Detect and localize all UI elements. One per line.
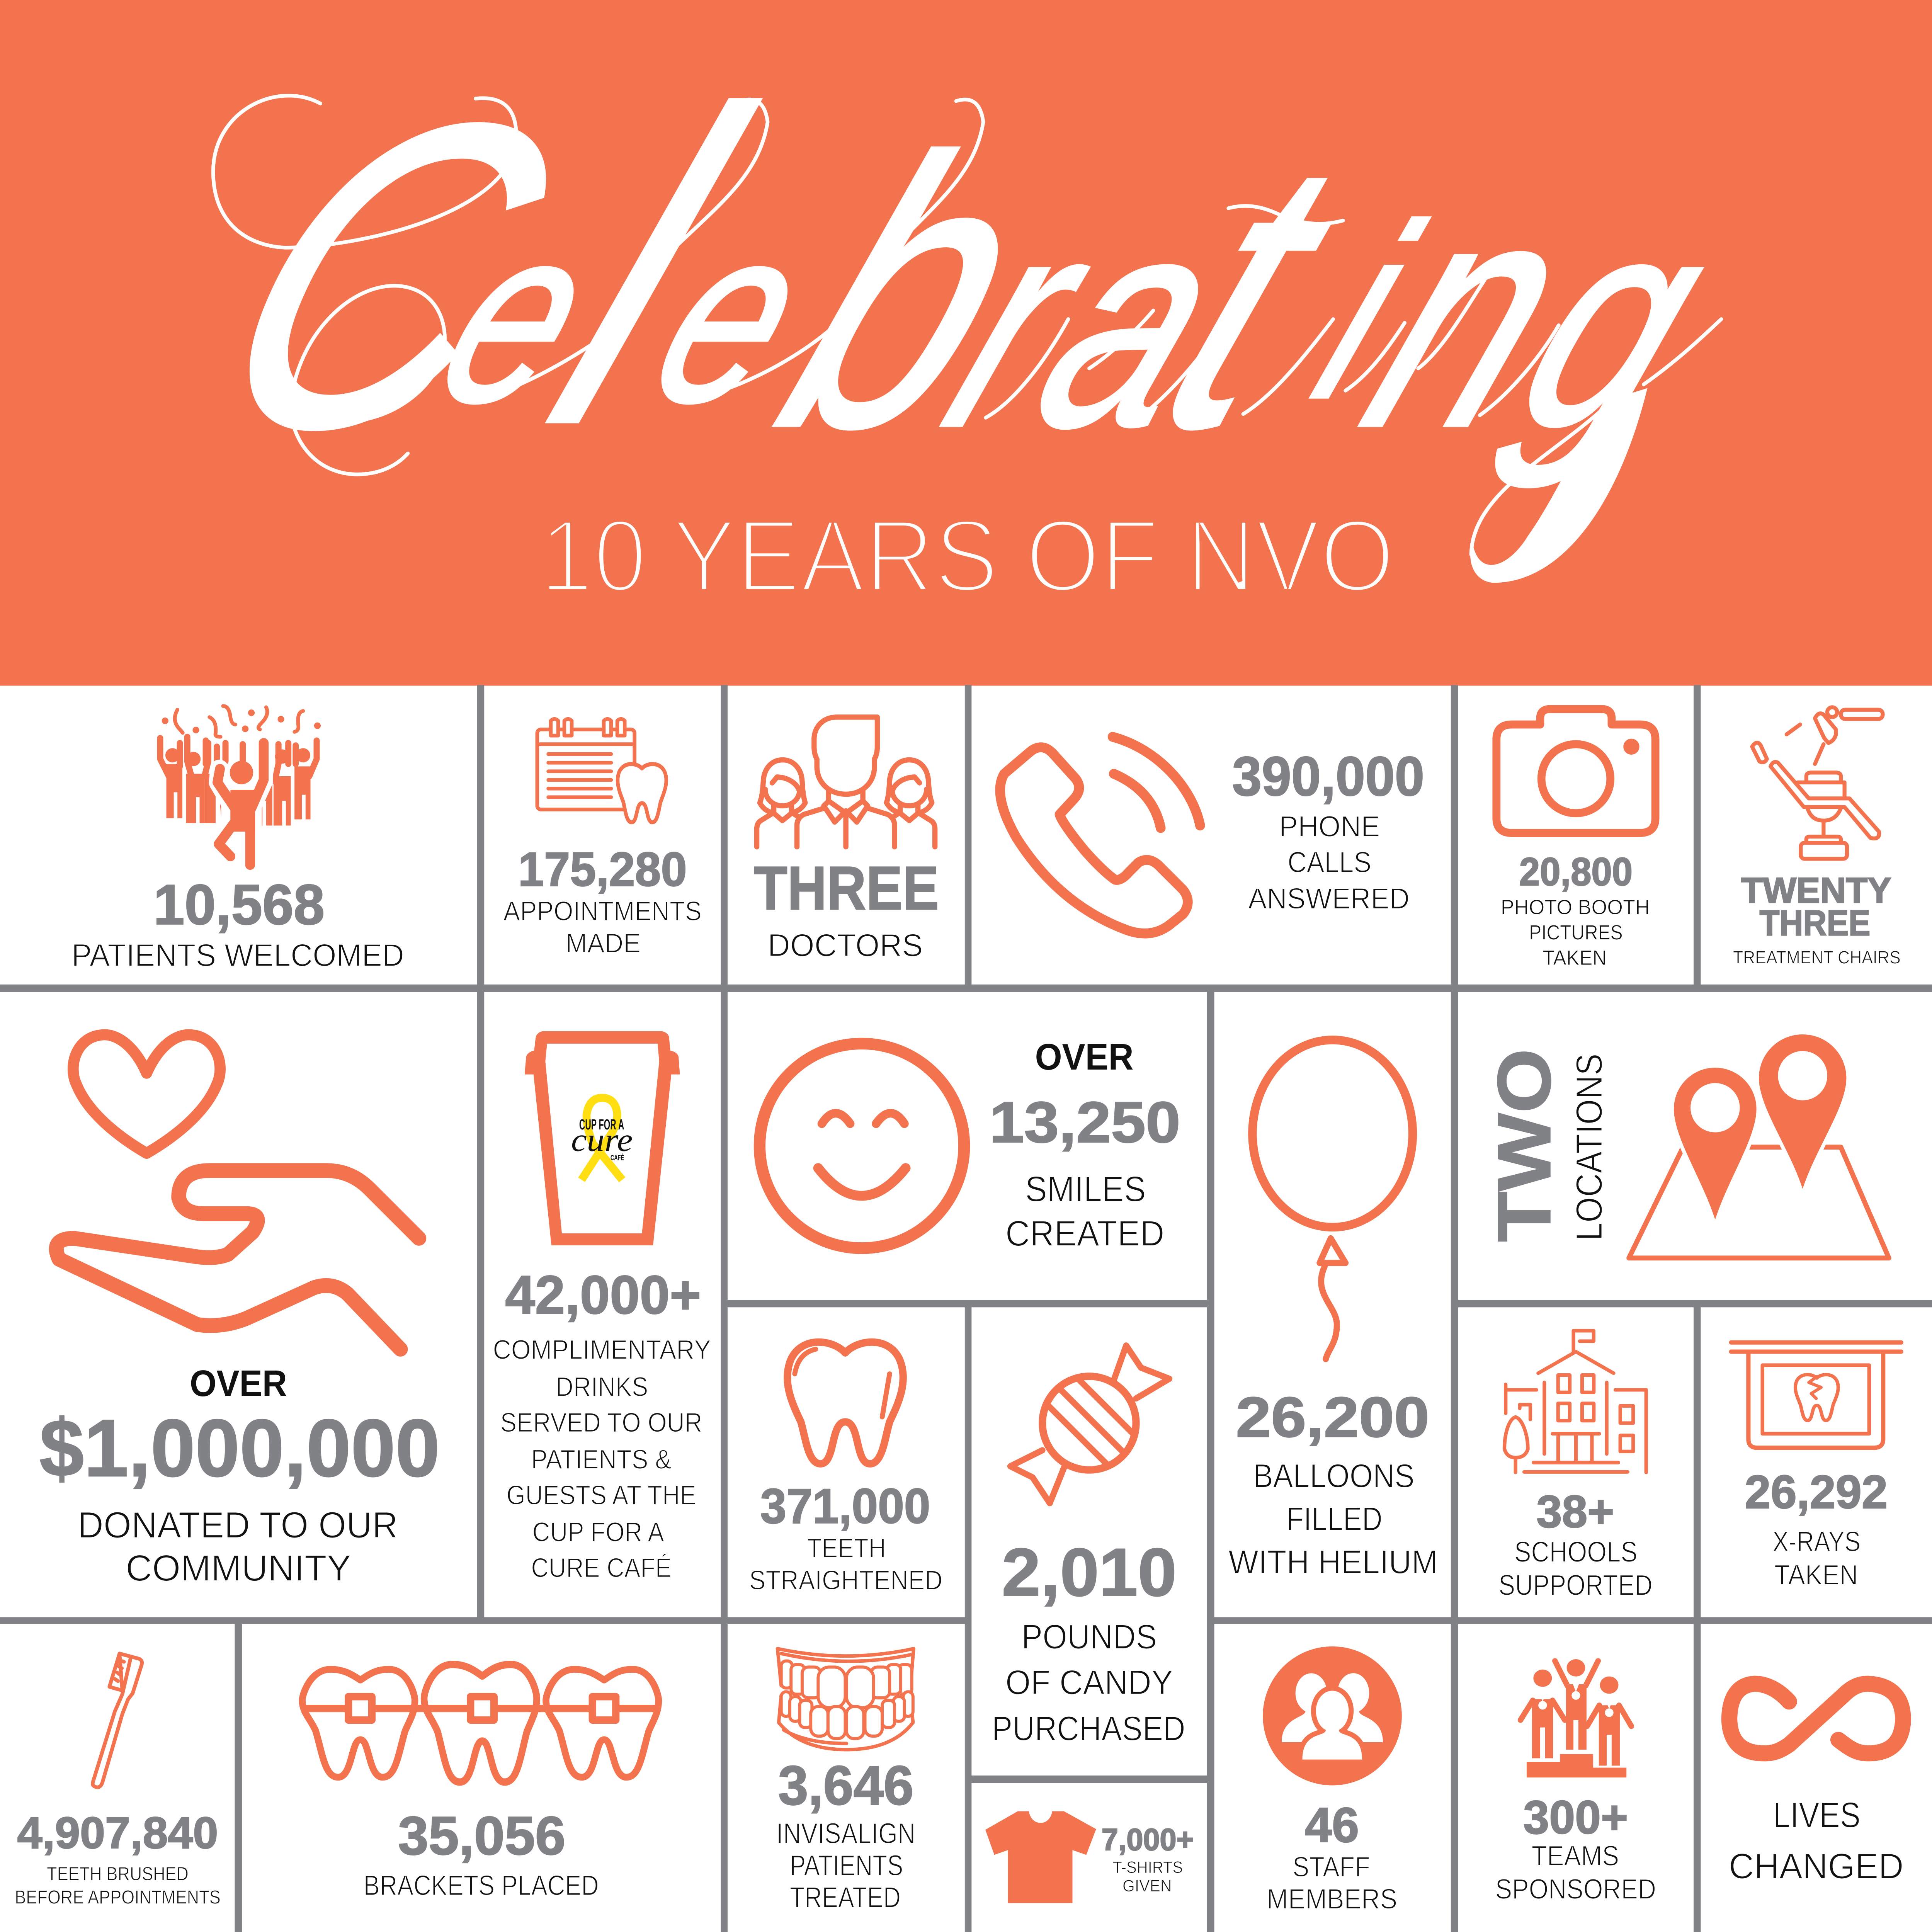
icon: cup with ribbon: CUP FOR A bbox=[579, 1116, 624, 1133]
label: WITH HELIUM bbox=[1228, 1544, 1438, 1581]
stat: $1,000,000 bbox=[39, 1402, 440, 1493]
label: COMMUNITY bbox=[126, 1548, 351, 1589]
heading: OVER bbox=[1035, 1036, 1134, 1078]
panel: photo booth bbox=[1497, 709, 1655, 969]
label: DRINKS bbox=[556, 1371, 648, 1402]
panel: candy bbox=[992, 1345, 1185, 1748]
label: POUNDS bbox=[1021, 1617, 1157, 1656]
label bbox=[1248, 810, 1410, 915]
icon: toothbrush bbox=[93, 1653, 142, 1787]
label: TAKEN bbox=[1543, 946, 1607, 969]
label bbox=[1005, 1169, 1164, 1253]
icon: smiley face bbox=[760, 1044, 964, 1248]
label: LIVES bbox=[1773, 1795, 1861, 1835]
title: Celebrating: r bbox=[912, 158, 1136, 488]
label bbox=[1729, 1795, 1904, 1886]
label: TEETH bbox=[807, 1533, 886, 1563]
stat: 2,010 bbox=[1002, 1534, 1177, 1610]
label: SCHOOLS bbox=[1514, 1536, 1638, 1568]
stat: 26,200 bbox=[1236, 1386, 1429, 1449]
title: Celebrating: t bbox=[1119, 82, 1388, 505]
title: Celebrating: g bbox=[1481, 158, 1751, 490]
icon: phone handset bbox=[1000, 737, 1200, 934]
stat: 35,056 bbox=[398, 1805, 566, 1866]
panel: x-rays bbox=[1731, 1342, 1901, 1591]
stat: TWO bbox=[1482, 1049, 1566, 1242]
central figure bbox=[218, 742, 264, 869]
icon: infinity bbox=[1729, 1684, 1903, 1753]
title: Celebrating: a bbox=[999, 158, 1266, 488]
stat: 38+ bbox=[1536, 1486, 1614, 1537]
panel: staff bbox=[1263, 1646, 1402, 1915]
icon: school building bbox=[1504, 1331, 1646, 1473]
label: CALLS bbox=[1287, 846, 1371, 879]
title: Celebrating: e bbox=[621, 177, 844, 453]
stat: 175,280 bbox=[518, 843, 687, 896]
stat: 300+ bbox=[1523, 1791, 1628, 1844]
label bbox=[992, 1617, 1185, 1748]
panel: drinks bbox=[493, 1031, 711, 1583]
stat: 26,292 bbox=[1745, 1466, 1888, 1518]
label: COMPLIMENTARY bbox=[493, 1334, 711, 1365]
label: BEFORE APPOINTMENTS bbox=[15, 1887, 221, 1908]
title: Celebrating: n bbox=[1327, 135, 1617, 493]
label bbox=[1501, 896, 1650, 969]
icon: calendar and tooth bbox=[537, 719, 666, 822]
label: TREATMENT CHAIRS bbox=[1733, 947, 1901, 968]
panel: schools bbox=[1498, 1331, 1653, 1601]
icon: cup with ribbon: CAFÉ bbox=[611, 1154, 624, 1162]
title: Celebrating: e bbox=[408, 177, 630, 453]
stat: THREE bbox=[754, 854, 939, 922]
stat: 46 bbox=[1305, 1798, 1359, 1853]
stat: 4,907,840 bbox=[17, 1808, 218, 1858]
stat: THREE bbox=[1760, 903, 1871, 943]
stat: TWENTY bbox=[1741, 870, 1891, 910]
panel: treatment chairs bbox=[1733, 707, 1901, 968]
title: Celebrating: l bbox=[503, 20, 795, 516]
label: CREATED bbox=[1005, 1213, 1164, 1253]
icon: camera bbox=[1497, 709, 1655, 833]
icon: aligner and teeth bbox=[777, 1649, 913, 1750]
label: STAFF bbox=[1293, 1851, 1370, 1883]
icon: t-shirt bbox=[985, 1811, 1096, 1903]
panel: balloons bbox=[1228, 1040, 1438, 1581]
label: DOCTORS bbox=[768, 927, 923, 963]
panel: locations bbox=[1482, 1032, 1889, 1258]
label: X-RAYS bbox=[1772, 1526, 1861, 1558]
label: TEAMS bbox=[1532, 1840, 1619, 1872]
icon: cup with ribbon bbox=[525, 1031, 680, 1245]
icon: medal winners on podium bbox=[1520, 1659, 1631, 1777]
stat: 10,568 bbox=[153, 873, 325, 937]
label: CURE CAFÉ bbox=[531, 1553, 672, 1583]
background figures bbox=[160, 737, 317, 781]
label: MEMBERS bbox=[1267, 1883, 1397, 1915]
stat: 7,000+ bbox=[1102, 1822, 1194, 1857]
label bbox=[1267, 1851, 1397, 1915]
stat: 13,250 bbox=[990, 1090, 1180, 1155]
label: PATIENTS bbox=[790, 1849, 903, 1881]
icon: team in circle bbox=[1263, 1646, 1402, 1786]
label bbox=[1228, 1458, 1438, 1581]
label: PICTURES bbox=[1529, 921, 1623, 944]
label bbox=[1112, 1858, 1183, 1895]
label bbox=[1495, 1840, 1656, 1905]
label: PHOTO BOOTH bbox=[1501, 896, 1650, 919]
panel: phone calls bbox=[1000, 737, 1424, 934]
panel: patients welcomed bbox=[71, 706, 404, 973]
label bbox=[776, 1817, 915, 1913]
label bbox=[78, 1505, 398, 1589]
subtitle: 10 YEARS OF NVO bbox=[540, 498, 1395, 614]
label: FILLED bbox=[1286, 1500, 1383, 1537]
label: PURCHASED bbox=[992, 1709, 1185, 1748]
stat: 3,646 bbox=[778, 1755, 913, 1816]
label: OF CANDY bbox=[1005, 1663, 1173, 1702]
label: INVISALIGN bbox=[776, 1817, 915, 1849]
label bbox=[1498, 1536, 1653, 1601]
label: TEETH BRUSHED bbox=[47, 1863, 189, 1884]
icon: dental chair bbox=[1752, 707, 1883, 859]
title: Celebrating: i bbox=[1286, 173, 1449, 449]
panel: teams bbox=[1495, 1659, 1656, 1905]
label bbox=[493, 1334, 711, 1583]
panel: doctors bbox=[754, 717, 939, 963]
label: SUPPORTED bbox=[1498, 1569, 1653, 1601]
label: SERVED TO OUR bbox=[500, 1407, 702, 1437]
title: Celebrating: b bbox=[736, 80, 1082, 506]
label: CHANGED bbox=[1729, 1846, 1904, 1886]
icon: x-ray viewer bbox=[1731, 1342, 1901, 1448]
label: STRAIGHTENED bbox=[749, 1565, 942, 1595]
panel: appointments bbox=[503, 719, 702, 958]
label: GIVEN bbox=[1122, 1877, 1172, 1895]
icon: tooth bbox=[787, 1342, 903, 1464]
icon: heart over hand bbox=[56, 1035, 419, 1349]
label: SPONSORED bbox=[1495, 1873, 1656, 1905]
icon: three doctors bbox=[757, 717, 935, 847]
icon: wrapped candy bbox=[1010, 1345, 1169, 1503]
icon: cup with ribbon: cure bbox=[571, 1121, 633, 1158]
label: PATIENTS WELCOMED bbox=[71, 938, 404, 973]
label: SMILES bbox=[1025, 1169, 1146, 1209]
label: PHONE bbox=[1279, 810, 1380, 843]
stat bbox=[1741, 870, 1891, 943]
panel: teeth straightened bbox=[749, 1342, 942, 1595]
label: PATIENTS & bbox=[531, 1444, 672, 1475]
label bbox=[749, 1533, 942, 1595]
label bbox=[15, 1863, 221, 1908]
panel: lives changed bbox=[1729, 1684, 1904, 1886]
grid lines bbox=[0, 685, 1932, 1932]
label: DONATED TO OUR bbox=[78, 1505, 398, 1546]
label: TREATED bbox=[790, 1881, 901, 1913]
icon: map with pins bbox=[1629, 1032, 1889, 1258]
label: TAKEN bbox=[1774, 1559, 1858, 1591]
label: BALLOONS bbox=[1253, 1458, 1415, 1495]
label: MADE bbox=[566, 928, 641, 958]
icon: balloon bbox=[1252, 1040, 1413, 1359]
label: BRACKETS PLACED bbox=[364, 1869, 599, 1901]
label: APPOINTMENTS bbox=[503, 896, 702, 926]
icon: braces on teeth bbox=[302, 1665, 658, 1782]
label bbox=[1772, 1526, 1861, 1591]
title: Celebrating: C bbox=[161, 34, 612, 517]
label: ANSWERED bbox=[1248, 883, 1410, 915]
label: CUP FOR A bbox=[532, 1517, 664, 1547]
panel: toothbrush bbox=[15, 1653, 221, 1908]
label: T-SHIRTS bbox=[1112, 1858, 1183, 1877]
panel: t-shirts bbox=[985, 1811, 1194, 1903]
stat: 371,000 bbox=[760, 1479, 930, 1534]
heading: OVER bbox=[190, 1363, 287, 1404]
label bbox=[503, 896, 702, 958]
panel: smiles bbox=[760, 1036, 1180, 1253]
panel: invisalign bbox=[776, 1649, 915, 1913]
stat: 390,000 bbox=[1232, 745, 1424, 807]
label: LOCATIONS bbox=[1568, 1053, 1610, 1241]
title flourishes bbox=[213, 96, 1721, 583]
panel: brackets bbox=[302, 1665, 658, 1901]
stat: 42,000+ bbox=[505, 1264, 701, 1325]
icon: celebrating crowd bbox=[160, 706, 321, 869]
label: GUESTS AT THE bbox=[507, 1480, 696, 1510]
stat: 20,800 bbox=[1519, 850, 1633, 894]
panel: donated bbox=[39, 1035, 440, 1589]
header banner bbox=[0, 0, 1932, 686]
